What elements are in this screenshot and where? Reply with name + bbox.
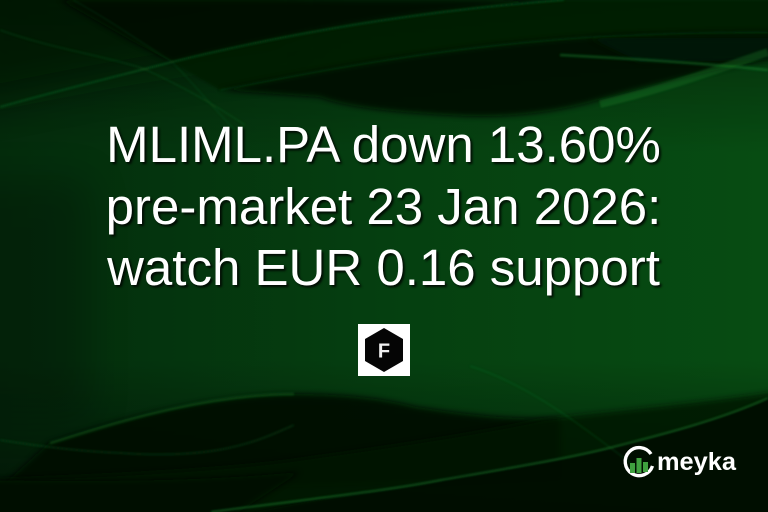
meyka logo (624, 446, 737, 478)
title: watch EUR 0.16 support (107, 239, 660, 296)
title: pre-market 23 Jan 2026: (106, 178, 661, 235)
soft darkening (0, 0, 300, 105)
title: MLIML.PA down 13.60% (106, 116, 661, 173)
dark band lower right (0, 390, 768, 512)
title (106, 116, 662, 298)
bottom darkest (211, 390, 768, 512)
top band (60, 0, 564, 62)
bottom dark hill (0, 394, 560, 490)
icon: F hexagon logo (358, 324, 410, 376)
top dark blob (220, 32, 768, 116)
icon: meyka ring and bars (625, 448, 652, 476)
icon: F hexagon logo: F (378, 340, 390, 362)
wordmark: meyka (657, 448, 737, 476)
